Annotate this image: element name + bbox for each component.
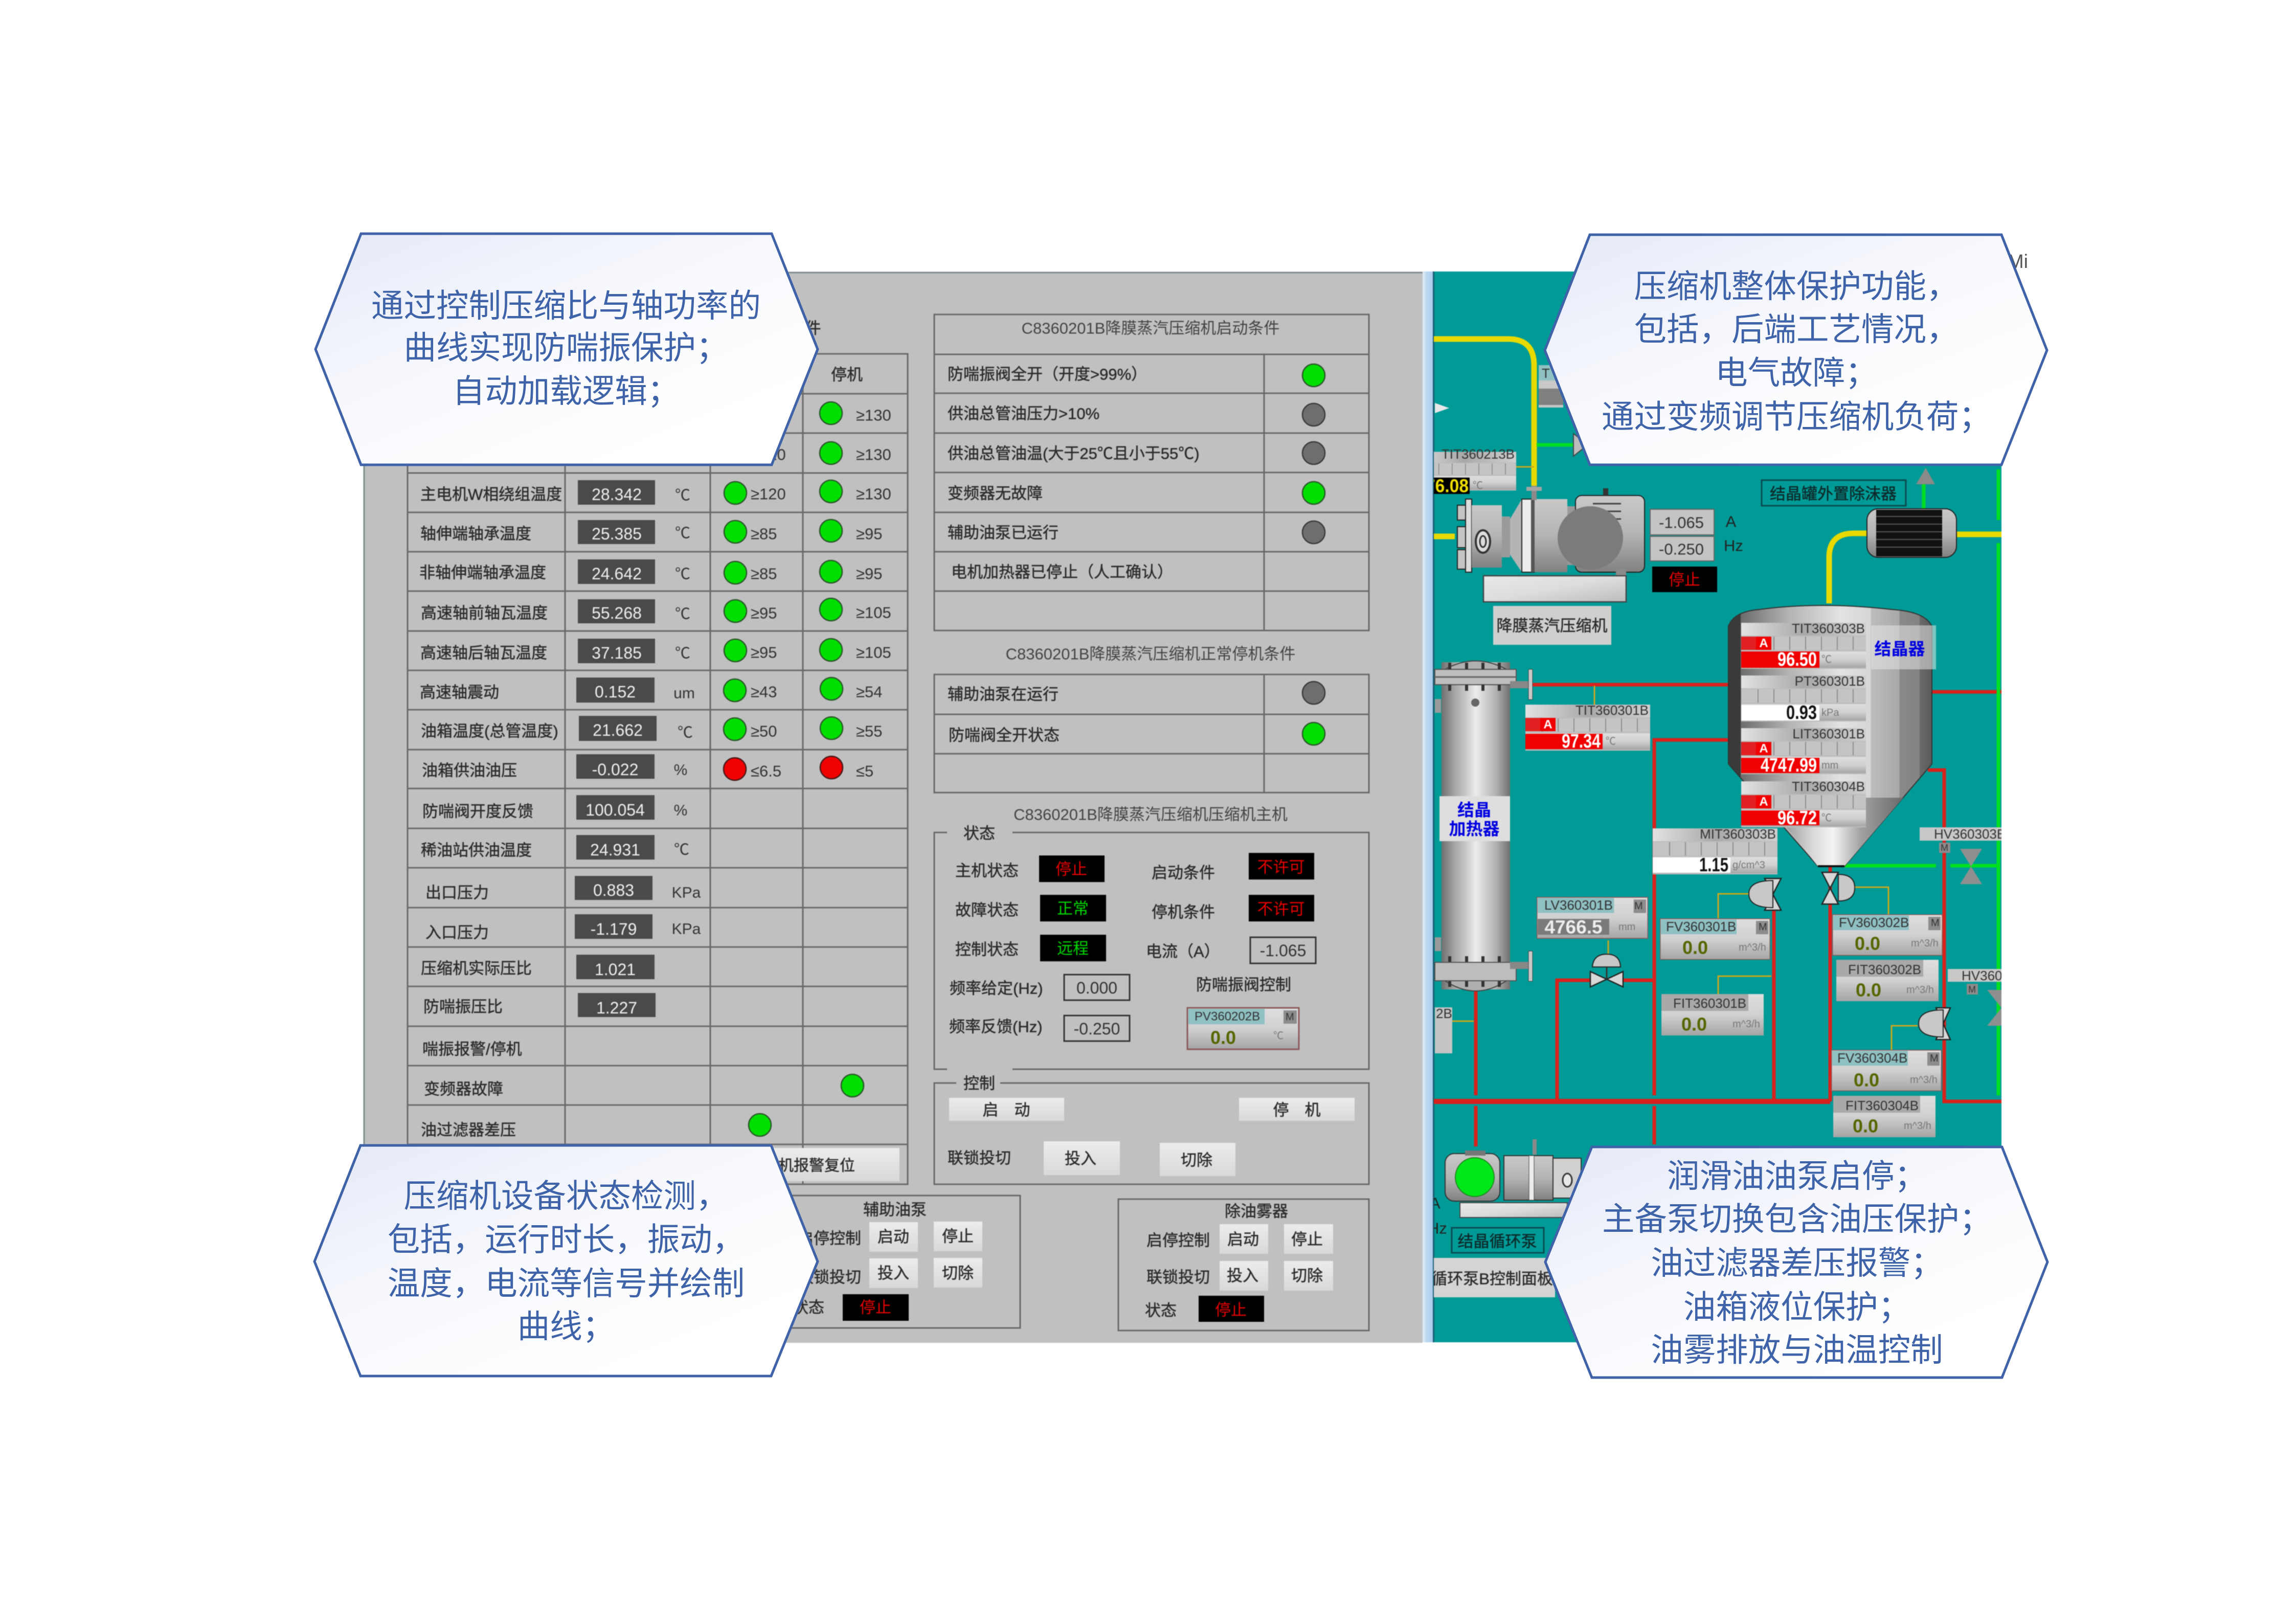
- callout: lubrication: 油过滤器差压报警；: [1651, 1246, 1943, 1281]
- panel: control: 投入: [1065, 1149, 1096, 1168]
- widget: TIT360301B: A: [1543, 718, 1552, 731]
- widget: LV360301B: M: [1634, 900, 1643, 912]
- label: crystallizing circulation pump: [1452, 1228, 1544, 1253]
- callout: condition monitoring: 温度，电流等信号并绘制: [388, 1266, 745, 1302]
- widget: TIT360303B: A: [1759, 636, 1768, 650]
- panel: auxiliary oil pump: 启停控制: [798, 1229, 861, 1248]
- row: high speed front bearing: ℃: [675, 605, 690, 623]
- row: outlet pressure: 出口压力: [425, 884, 489, 902]
- widget: PT360301B: kPa: [1821, 707, 1839, 718]
- widget: FV360302B: 0.0: [1855, 933, 1880, 954]
- row: surge alarm: 喘振报警/停机: [422, 1040, 522, 1058]
- widget: FV360304B: [1831, 1050, 1942, 1091]
- widget: PV360202B: ℃: [1273, 1030, 1284, 1042]
- widget: TIT360304B: [1741, 779, 1866, 829]
- row: actual pressure ratio: [421, 955, 655, 979]
- callout: overall protection: 压缩机整体保护功能，: [1634, 269, 1959, 305]
- row: anti-surge valve feedback: %: [674, 802, 687, 819]
- panel: main unit status: -0.250: [1074, 1020, 1120, 1038]
- widget: MIT360303B: [1653, 826, 1777, 876]
- widget: TIT360301B: [1525, 703, 1650, 752]
- row: oil filter differential pressure: [421, 1114, 771, 1139]
- row: tank temperature: ≥55: [856, 722, 883, 740]
- widget: MIT360303B: MIT360303B: [1700, 826, 1776, 842]
- icon: control valves: [1590, 849, 2016, 1040]
- panel: main unit status: 启动条件: [1152, 864, 1215, 882]
- widget: LV360301B: 4766.5: [1544, 916, 1603, 938]
- panel: main unit status: 不许可: [1257, 858, 1305, 876]
- callout: lubrication: 主备泵切换包含油压保护；: [1602, 1202, 1992, 1237]
- widget: FIT360302B: 0.0: [1856, 980, 1881, 1000]
- panel: control: [934, 1075, 1369, 1184]
- widget: PT360301B: [1741, 673, 1866, 724]
- widget: FV360301B: m^3/h: [1739, 942, 1766, 953]
- label: compressor: 降膜蒸汽压缩机: [1496, 617, 1608, 635]
- row: U phase winding: [420, 402, 891, 424]
- row: high speed rear bearing: 37.185: [592, 644, 642, 662]
- panel: start conditions: 辅助油泵已运行: [948, 524, 1059, 542]
- row: anti-surge valve feedback: [422, 795, 687, 820]
- row: oil pressure: 油箱供油油压: [422, 762, 517, 779]
- widget: FV360301B: [1660, 918, 1770, 960]
- widget: FIT360301B: [1661, 994, 1764, 1035]
- readings: current and frequency: -0.250: [1659, 540, 1704, 558]
- callout: condition monitoring: 曲线；: [517, 1309, 615, 1345]
- icon: vent arrow: [1916, 468, 1935, 484]
- row: non-drive bearing temperature: ℃: [675, 566, 690, 583]
- row: inlet pressure: -1.179: [591, 920, 637, 938]
- panel: main unit status: -1.065: [1260, 941, 1306, 960]
- row: inlet pressure: KPa: [672, 920, 701, 938]
- label: external demister: 结晶罐外置除沫器: [1770, 485, 1897, 503]
- row: high speed front bearing: ≥95: [751, 604, 777, 622]
- panel: main unit status: 停止: [1055, 860, 1087, 878]
- widget: FV360301B: 0.0: [1682, 937, 1708, 958]
- panel: oil mist remover: 启停控制: [1146, 1231, 1210, 1250]
- label: A and Hz fragments: A: [1430, 1194, 1440, 1212]
- panel: main unit status: 故障状态: [955, 901, 1019, 919]
- label: external demister: [1762, 480, 1906, 506]
- panel: oil mist remover: 停止: [1291, 1230, 1323, 1249]
- row: U phase winding: ≥120: [751, 406, 786, 424]
- widget: TIT360303B: TIT360303B: [1792, 621, 1865, 636]
- panel: main unit status: 状态: [963, 824, 995, 843]
- row: V phase winding: ≥120: [751, 446, 786, 463]
- widget: FV360304B: 0.0: [1854, 1070, 1879, 1090]
- widget: LIT360301B: A: [1759, 741, 1768, 756]
- icon: falling film vapor compressor: [1457, 486, 1645, 602]
- panel: auxiliary oil pump: [639, 1196, 1020, 1328]
- panel: main unit status: 远程: [1057, 940, 1089, 957]
- widget: LIT360301B: LIT360301B: [1792, 726, 1865, 741]
- panel: main unit status: C8360201B降膜蒸汽压缩机压缩机主机: [1014, 806, 1288, 823]
- row: inlet pressure: [425, 914, 701, 942]
- row: high speed rear bearing: ℃: [675, 645, 690, 662]
- row: tank temperature: [421, 716, 883, 741]
- row: high speed front bearing: 高速轴前轴瓦温度: [421, 604, 548, 622]
- widget: FV360301B: FV360301B: [1666, 919, 1736, 934]
- panel: control: 切除: [1181, 1152, 1212, 1169]
- panel: oil mist remover: 切除: [1291, 1267, 1323, 1284]
- widget: HV360: M: [1968, 984, 1976, 995]
- panel: oil mist remover: [1118, 1199, 1369, 1331]
- panel: oil mist remover: 状态: [1145, 1302, 1177, 1319]
- label: crystallizing circulation pump: 结晶循环泵: [1457, 1232, 1537, 1251]
- panel: main unit status: 正常: [1057, 900, 1089, 917]
- table title fragment: 件: [805, 319, 821, 337]
- row: vibration: ≥54: [856, 683, 883, 701]
- widget: FV360302B: [1832, 914, 1943, 956]
- panel: oil mist remover: 联锁投切: [1146, 1268, 1210, 1287]
- row: oil station temperature: 24.931: [590, 841, 640, 859]
- row: V phase winding: ≥130: [856, 446, 891, 463]
- panel: main unit status: 频率给定(Hz): [950, 980, 1043, 997]
- widget: FIT360301B: FIT360301B: [1673, 996, 1746, 1011]
- icon: demister motor: [1867, 509, 1956, 557]
- row: U phase winding: 主电机U相绕组温度: [420, 406, 558, 423]
- panel: auxiliary oil pump: 启动: [877, 1228, 909, 1246]
- readings: current and frequency: [1650, 509, 1743, 592]
- panel: process schematic: [1411, 272, 2033, 1342]
- row: oil pressure: %: [674, 762, 687, 778]
- widget: TIT360213B: TIT360213B: [1442, 446, 1515, 462]
- widget: FIT360301B: m^3/h: [1732, 1019, 1760, 1030]
- widget: TIT360301B: ℃: [1606, 736, 1616, 747]
- panel: auxiliary oil pump: 状态: [793, 1299, 824, 1316]
- panel: start conditions: 供油总管油温(大于25℃且小于55℃): [948, 445, 1200, 462]
- widget: HV360303B: HV360303B: [1934, 826, 2006, 842]
- label: A and Hz fragments: Hz: [1428, 1219, 1447, 1237]
- widget: TIT360213B: [1433, 449, 1517, 494]
- widget: FIT360304B: m^3/h: [1904, 1120, 1931, 1132]
- row: oil filter differential pressure: 油过滤器差压: [421, 1121, 516, 1139]
- panel: main unit status: 电流（A）: [1146, 943, 1220, 960]
- widget: PT360301B: 0.93: [1786, 702, 1817, 724]
- callout: overall protection: 包括，后端工艺情况，: [1634, 312, 1959, 348]
- panel: control: 停 机: [1273, 1101, 1320, 1119]
- row: high speed rear bearing: [420, 639, 891, 663]
- widget: FIT360302B: [1836, 960, 1939, 1001]
- callout: anti-surge protection: [316, 234, 818, 465]
- row: oil station temperature: ℃: [674, 842, 689, 858]
- panel: parameter table: [408, 319, 908, 1184]
- row: tank temperature: 21.662: [593, 721, 643, 739]
- row: bearing temperature: 25.385: [592, 525, 642, 543]
- row: W phase winding: [420, 480, 891, 505]
- widget: FIT360301B: 0.0: [1681, 1013, 1707, 1035]
- row: non-drive bearing temperature: 非轴伸端轴承温度: [419, 563, 546, 582]
- label: A and Hz fragments: [1428, 1194, 1447, 1237]
- callout: lubrication: 油雾排放与油温控制: [1651, 1333, 1943, 1368]
- row: vibration: ≥43: [751, 683, 777, 701]
- panel: main unit status: 频率反馈(Hz): [949, 1018, 1043, 1036]
- callout: lubrication: 润滑油油泵启停；: [1667, 1159, 1927, 1194]
- row: oil station temperature: [421, 835, 689, 860]
- row: W phase winding: 主电机W相绕组温度: [420, 486, 562, 503]
- row: W phase winding: ≥130: [856, 485, 891, 503]
- panel: stop conditions: [934, 645, 1369, 793]
- row: inverter fault: [424, 1074, 864, 1098]
- row: high speed rear bearing: ≥95: [751, 643, 777, 662]
- column header: shutdown: 停机: [831, 366, 863, 384]
- divider strip between screens: [1423, 272, 1433, 1342]
- widget: FV360304B: FV360304B: [1837, 1050, 1907, 1066]
- widget: LV360301B: mm: [1618, 921, 1635, 933]
- row: vibration: 高速轴震动: [420, 683, 499, 702]
- callout: lubrication: [1545, 1147, 2047, 1378]
- row: non-drive bearing temperature: ≥85: [751, 565, 777, 583]
- row: U phase winding: ≥130: [856, 406, 891, 424]
- panel: main unit status: 控制状态: [955, 941, 1019, 958]
- row: high speed front bearing: ≥105: [856, 603, 891, 622]
- panel: control: 启 动: [983, 1101, 1030, 1119]
- widget: FV360302B: M: [1931, 917, 1940, 929]
- widget: HV360303B: [1920, 826, 2007, 853]
- widget: FIT360304B: [1833, 1096, 1935, 1137]
- row: tank temperature: ≥50: [751, 722, 777, 740]
- widget: small hidden tag: [1539, 365, 1563, 408]
- widget: PV360202B: PV360202B: [1195, 1009, 1260, 1024]
- corner text fragment: Mi: [2008, 251, 2028, 273]
- row: vibration: 0.152: [595, 683, 636, 701]
- widget: PT360301B: PT360301B: [1795, 673, 1865, 689]
- widget: FV360301B: M: [1759, 921, 1767, 933]
- row: V phase winding: 主电机V相绕组温度: [420, 446, 558, 463]
- widget: FV360302B: m^3/h: [1911, 938, 1939, 949]
- widget: LIT360301B: mm: [1821, 760, 1838, 771]
- panel: auxiliary oil pump: 投入: [877, 1264, 909, 1282]
- panel: oil mist remover: 停止: [1215, 1301, 1247, 1319]
- panel: main unit status: 主机状态: [955, 862, 1019, 880]
- row: bearing temperature: ≥95: [856, 525, 883, 543]
- panel: auxiliary oil pump: 停止: [942, 1227, 974, 1246]
- row: outlet pressure: 0.883: [593, 881, 634, 899]
- panel: compressor control screen: [364, 272, 1433, 1343]
- readings: current and frequency: Hz: [1724, 537, 1743, 554]
- panel: start conditions: [934, 314, 1369, 630]
- readings: current and frequency: 停止: [1669, 571, 1700, 589]
- widget: small hidden tag: T: [1542, 366, 1550, 381]
- row: non-drive bearing temperature: ≥95: [856, 565, 883, 583]
- widget: TIT360303B: 96.50: [1777, 649, 1817, 670]
- row: oil pressure: ≤6.5: [751, 762, 781, 780]
- widget: TIT360301B: 97.34: [1562, 731, 1601, 752]
- panel: main unit status: 防喘振阀控制: [1196, 976, 1291, 994]
- callout: anti-surge protection: 自动加载逻辑；: [453, 374, 680, 410]
- widget: FIT360304B: 0.0: [1853, 1116, 1878, 1136]
- widget: TIT360304B: A: [1759, 795, 1768, 809]
- callout: condition monitoring: [314, 1145, 818, 1376]
- panel: oil mist remover: 投入: [1227, 1267, 1258, 1284]
- widget: FV360304B: M: [1930, 1053, 1939, 1064]
- label: compressor: [1493, 606, 1611, 645]
- panel: oil mist remover: 除油雾器: [1225, 1203, 1288, 1220]
- panel: oil mist remover: 启动: [1227, 1230, 1259, 1249]
- row: actual pressure ratio: 1.021: [595, 960, 636, 979]
- row: anti-surge ratio: 1.227: [596, 999, 637, 1017]
- panel: start conditions: C8360201B降膜蒸汽压缩机启动条件: [1022, 319, 1279, 337]
- label: crystallizer: 结晶器: [1875, 639, 1925, 659]
- panel: auxiliary oil pump: 联锁投切: [798, 1268, 861, 1287]
- panel: start conditions: 电机加热器已停止（人工确认）: [951, 563, 1173, 581]
- widget: TIT360303B: ℃: [1821, 654, 1832, 665]
- panel: stop conditions: 防喘阀全开状态: [949, 726, 1060, 745]
- icon: crystallizer tank: [1728, 605, 1932, 866]
- widget: FIT360302B: FIT360302B: [1848, 962, 1921, 977]
- row: non-drive bearing temperature: [419, 559, 883, 584]
- icon: flow arrows: [1435, 403, 1588, 456]
- row: high speed rear bearing: ≥105: [856, 643, 891, 662]
- widget: TIT360303B: [1741, 621, 1866, 670]
- panel: auxiliary oil pump: 辅助油泵: [863, 1201, 927, 1219]
- row: oil pressure: ≤5: [856, 762, 873, 780]
- row: tank temperature: 油箱温度(总管温度): [421, 722, 558, 740]
- widget: HV360: [1948, 968, 2033, 995]
- panel: main unit status: 停机条件: [1152, 903, 1215, 921]
- row: anti-surge valve feedback: 防喘阀开度反馈: [422, 803, 533, 820]
- callout: anti-surge protection: 曲线实现防喘振保护；: [404, 330, 728, 366]
- row: inlet pressure: 入口压力: [425, 923, 489, 942]
- panel: auxiliary oil pump: 停止: [860, 1299, 891, 1316]
- panel: stop conditions: 辅助油泵在运行: [948, 685, 1059, 704]
- row: bearing temperature: [420, 520, 883, 544]
- panel: auxiliary oil pump: 切除: [942, 1264, 974, 1282]
- row: bearing temperature: ℃: [675, 525, 690, 542]
- row: anti-surge ratio: 防喘振压比: [423, 998, 503, 1016]
- widget: TIT360301B: TIT360301B: [1575, 703, 1649, 718]
- callout: lubrication: 油箱液位保护；: [1683, 1290, 1910, 1325]
- widget: 2B tag: [1435, 1006, 1452, 1053]
- row: vibration: um: [673, 685, 695, 702]
- widget: HV360: HV360304B: [1962, 968, 2033, 983]
- widget: 2B tag: 2B: [1436, 1006, 1452, 1021]
- widget: PV360202B: M: [1286, 1011, 1294, 1023]
- widget: FIT360302B: m^3/h: [1906, 984, 1934, 996]
- row: vibration: [420, 678, 883, 703]
- label: crystallizing heater: 加热器: [1449, 819, 1499, 839]
- panel: start conditions: 防喘振阀全开（开度>99%）: [948, 365, 1147, 384]
- button: alarm reset: 停机报警复位: [763, 1158, 855, 1174]
- callout: anti-surge protection: 通过控制压缩比与轴功率的: [371, 288, 761, 324]
- panel: stop conditions: C8360201B降膜蒸汽压缩机正常停机条件: [1006, 645, 1295, 663]
- panel: start conditions: 变频器无故障: [948, 485, 1043, 502]
- row: W phase winding: ℃: [675, 487, 690, 504]
- red process pipes: [1434, 685, 2001, 1146]
- row: W phase winding: ≥120: [751, 485, 786, 503]
- label: pump control panel button: [1431, 1258, 1555, 1297]
- row: anti-surge ratio: [423, 993, 656, 1017]
- row: high speed front bearing: [421, 598, 891, 623]
- panel: control: 控制: [963, 1075, 995, 1092]
- row: oil pressure: -0.022: [592, 760, 638, 779]
- row: outlet pressure: [425, 876, 701, 902]
- row: tank temperature: ℃: [678, 724, 693, 741]
- icon: crystallizing heater: [1435, 661, 1533, 991]
- label: crystallizing heater: 结晶: [1457, 801, 1491, 819]
- icon: circulation pump: [1445, 1139, 1581, 1218]
- widget: TIT360304B: ℃: [1821, 813, 1832, 824]
- panel: main unit status: [934, 806, 1369, 1069]
- widget: HV360303B: M: [1941, 843, 1948, 853]
- row: oil pressure: [422, 754, 873, 780]
- widget: TIT360304B: TIT360304B: [1792, 779, 1865, 794]
- row: high speed rear bearing: 高速轴后轴瓦温度: [420, 644, 547, 662]
- readings: current and frequency: A: [1726, 512, 1737, 531]
- widget: FV360302B: FV360302B: [1839, 915, 1909, 930]
- widget: LIT360301B: 4747.99: [1761, 755, 1817, 776]
- row: V phase winding: [420, 442, 891, 464]
- readings: current and frequency: -1.065: [1659, 513, 1704, 532]
- label: crystallizing heater: [1439, 796, 1510, 841]
- row: oil station temperature: 稀油站供油温度: [421, 842, 532, 859]
- callout: overall protection: 电气故障；: [1715, 355, 1878, 391]
- button: alarm reset: [639, 1148, 899, 1181]
- row: inverter fault: 变频器故障: [424, 1080, 503, 1098]
- row: bearing temperature: ≥85: [751, 525, 777, 543]
- widget: LV360301B: LV360301B: [1544, 897, 1613, 913]
- row: anti-surge valve feedback: 100.054: [586, 801, 645, 819]
- widget: LIT360301B: [1741, 726, 1866, 776]
- panel: control: 联锁投切: [948, 1149, 1011, 1167]
- row: high speed front bearing: 55.268: [592, 604, 642, 622]
- label: crystallizer: [1871, 625, 1936, 669]
- widget: FIT360304B: FIT360304B: [1845, 1098, 1919, 1113]
- widget: TIT360213B: ℃: [1473, 480, 1483, 491]
- panel: main unit status: 不许可: [1257, 900, 1305, 918]
- widget: MIT360303B: g/cm^3: [1732, 860, 1765, 871]
- widget: MIT360303B: 1.15: [1699, 854, 1728, 876]
- panel: start conditions: 供油总管油压力>10%: [948, 405, 1099, 422]
- widget: LV360301B: [1537, 897, 1648, 939]
- row: non-drive bearing temperature: 24.642: [592, 565, 642, 583]
- row: bearing temperature: 轴伸端轴承温度: [420, 525, 531, 543]
- label: pump control panel button: 循环泵B控制面板: [1431, 1270, 1553, 1288]
- yellow and green pipes: [1434, 339, 2001, 1095]
- row: actual pressure ratio: 压缩机实际压比: [421, 959, 532, 978]
- widget: PV360202B: 0.0: [1210, 1027, 1236, 1048]
- widget: TIT360304B: 96.72: [1777, 807, 1817, 829]
- panel: main unit status: 0.000: [1076, 979, 1117, 997]
- widget: TIT360213B: 76.08: [1426, 476, 1469, 496]
- callout: overall protection: [1545, 235, 2047, 465]
- widget: PV360202B: [1187, 1008, 1299, 1049]
- callout: condition monitoring: 包括，运行时长，振动，: [388, 1222, 745, 1258]
- callout: overall protection: 通过变频调节压缩机负荷；: [1602, 399, 1991, 435]
- widget: FV360304B: m^3/h: [1910, 1074, 1938, 1086]
- row: W phase winding: 28.342: [592, 485, 642, 504]
- row: outlet pressure: KPa: [672, 885, 701, 901]
- callout: condition monitoring: 压缩机设备状态检测，: [404, 1179, 728, 1214]
